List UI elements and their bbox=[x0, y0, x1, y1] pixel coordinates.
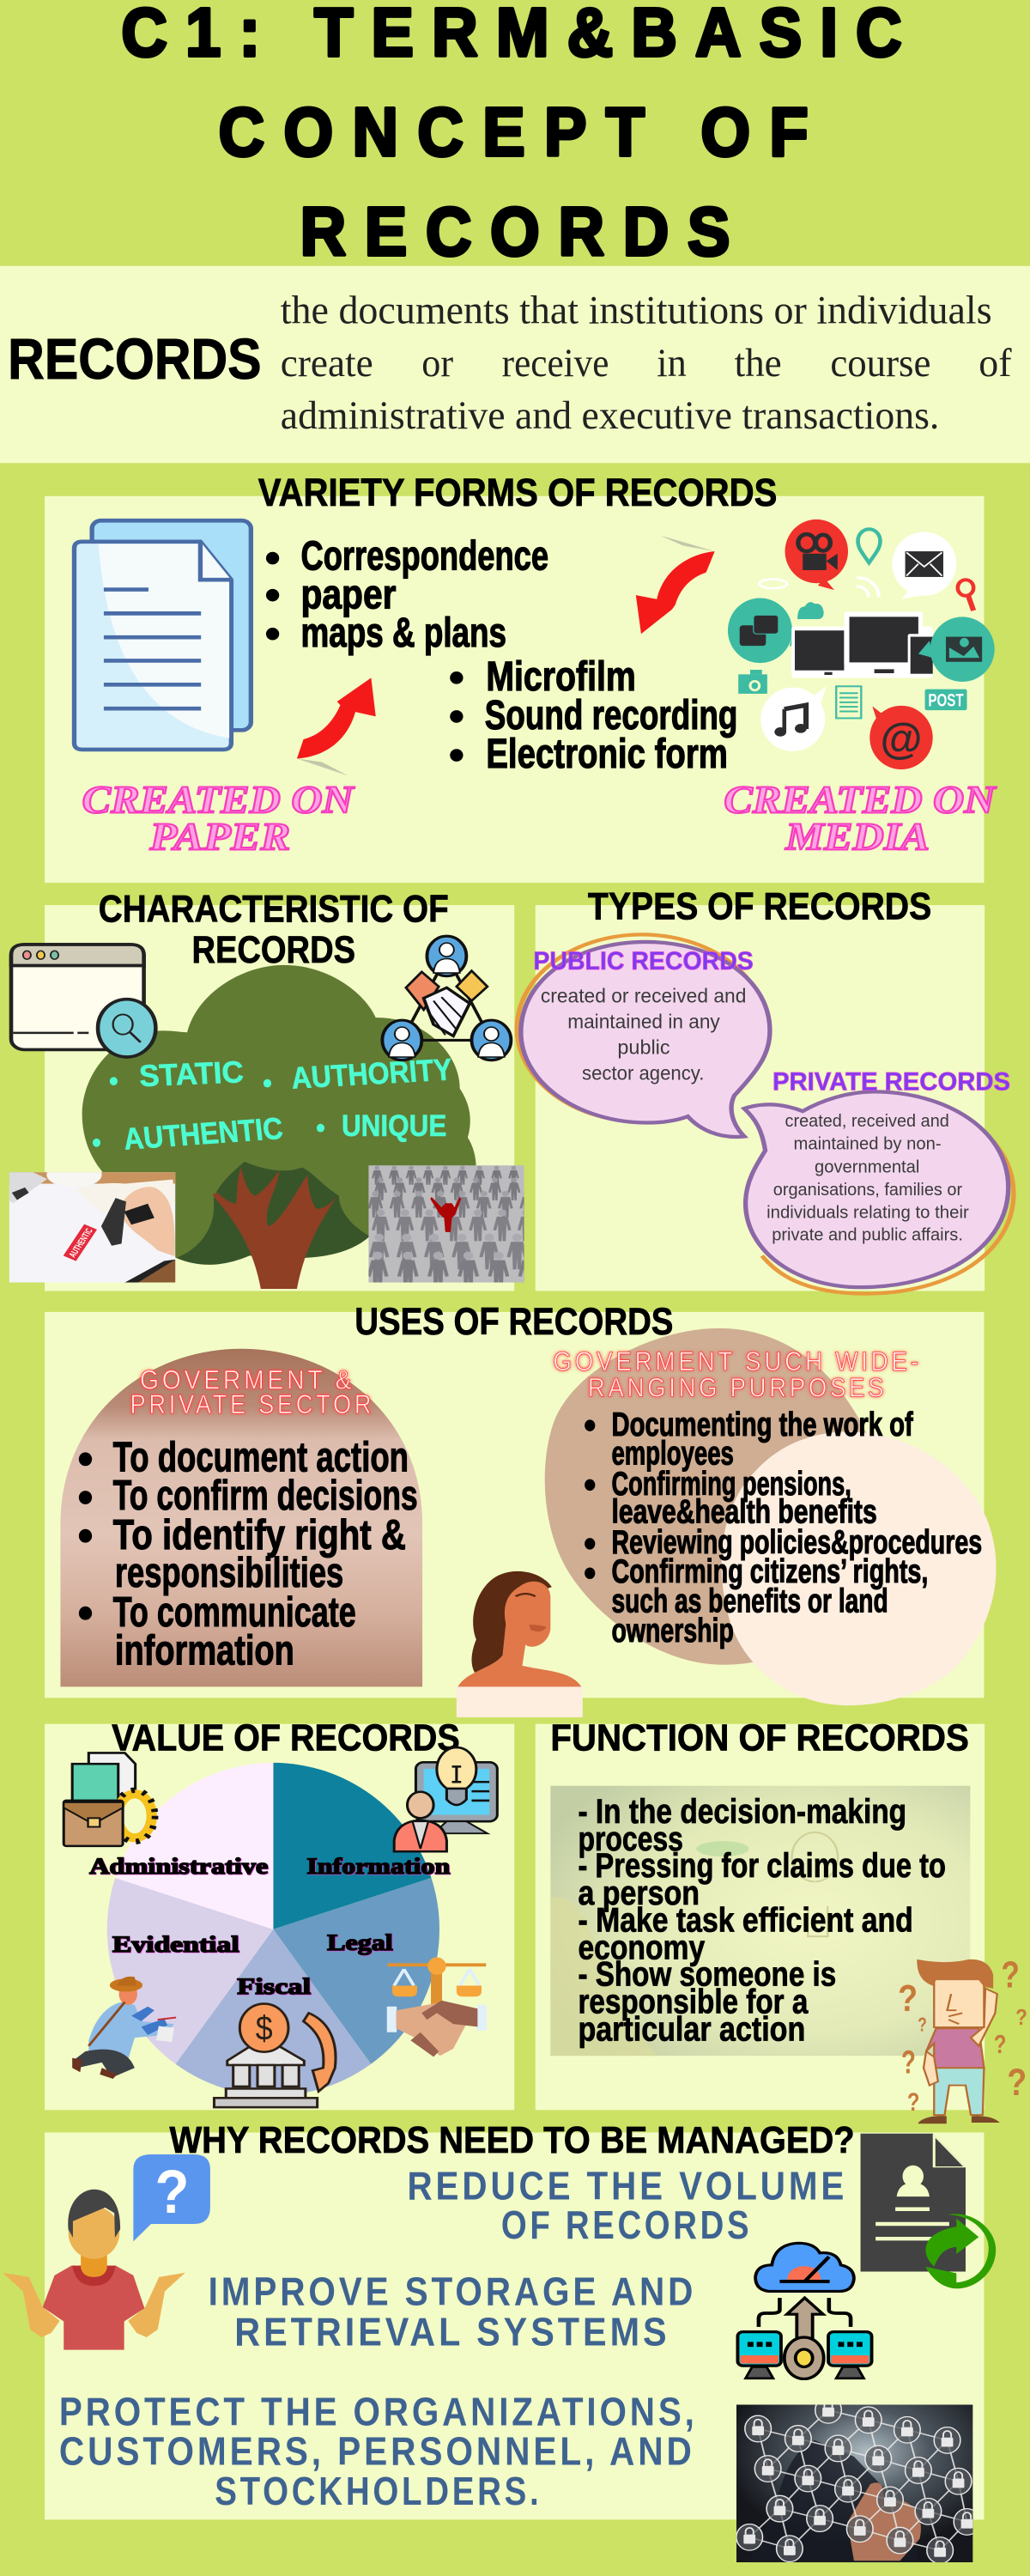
panel: uses of records bbox=[45, 1300, 997, 1717]
heading: characteristic bbox=[99, 888, 449, 971]
label: created on media bbox=[724, 779, 997, 859]
heading: characteristic: CHARACTERISTIC OF bbox=[99, 888, 449, 930]
bubble: public records: sector agency. bbox=[582, 1061, 704, 1084]
definition text: in bbox=[657, 340, 687, 385]
definition text: of bbox=[978, 340, 1012, 385]
pie label: information: Information bbox=[306, 1854, 450, 1879]
icon: media cluster bbox=[728, 519, 995, 769]
label: created on media: CREATED ON bbox=[724, 779, 997, 822]
arrow: media to list bbox=[636, 536, 715, 634]
reason: improve storage: IMPROVE STORAGE AND bbox=[209, 2269, 696, 2313]
heading: variety forms: VARIETY FORMS OF RECORDS bbox=[258, 471, 777, 514]
bubble: private records: maintained by non- bbox=[793, 1133, 942, 1153]
photo: security network bbox=[736, 2397, 980, 2563]
bubble: public records: public bbox=[617, 1036, 670, 1059]
reason: improve storage bbox=[209, 2269, 696, 2354]
tree labels: UNIQUE bbox=[342, 1109, 446, 1143]
bubble: private records: created, received and bbox=[785, 1110, 949, 1130]
icon: browser search window bbox=[11, 945, 155, 1057]
heading: records: RECORDS bbox=[8, 328, 262, 392]
function list: particular action bbox=[578, 2010, 805, 2048]
tree labels: AUTHENTIC bbox=[122, 1111, 285, 1157]
question marks: ? bbox=[994, 2030, 1006, 2059]
title: RECORDS bbox=[300, 193, 730, 270]
reason: protect the organizations: PROTECT THE ORGANIZATIONS, bbox=[59, 2389, 698, 2434]
bubble: private records: private and public affairs. bbox=[772, 1224, 963, 1244]
reason: improve storage: RETRIEVAL SYSTEMS bbox=[234, 2309, 670, 2354]
icon: archaeologist bbox=[72, 1977, 176, 2079]
bubble: public records bbox=[517, 934, 770, 1137]
subheading: government wide-ranging purposes: RANGING PURPOSES bbox=[588, 1371, 887, 1403]
stamp mark bbox=[64, 1224, 97, 1261]
pie label: fiscal: Fiscal bbox=[237, 1974, 311, 1999]
bubble: private records bbox=[744, 1068, 1014, 1293]
shape: textured arch bbox=[60, 1349, 422, 1686]
definition text: course bbox=[830, 340, 930, 385]
title: CONCEPT OF bbox=[219, 94, 809, 171]
icon: cloud network bbox=[737, 2243, 872, 2379]
tree labels bbox=[93, 1053, 453, 1157]
icon: question bubble: ? bbox=[155, 2158, 189, 2227]
list: wide-ranging purposes: employees bbox=[611, 1435, 734, 1472]
reason: protect the organizations: STOCKHOLDERS. bbox=[215, 2469, 542, 2513]
list: created on media: Electronic form bbox=[486, 731, 728, 776]
list: uses for government and private sector: To confirm decisions bbox=[113, 1472, 418, 1519]
icon: document with person bbox=[861, 2134, 966, 2271]
pie chart bbox=[107, 1763, 439, 2096]
label: created on media: MEDIA bbox=[785, 816, 930, 859]
reason: reduce the volume bbox=[407, 2163, 847, 2247]
list: created on media: Microfilm bbox=[486, 653, 636, 699]
reason: reduce the volume: OF RECORDS bbox=[501, 2202, 752, 2247]
label: created on paper bbox=[82, 779, 355, 859]
illustration: woman bbox=[457, 1571, 583, 1717]
list: created on media bbox=[450, 653, 737, 776]
question marks: ? bbox=[918, 2014, 927, 2036]
list: wide-ranging purposes: ownership bbox=[611, 1612, 734, 1649]
definition text: the bbox=[735, 340, 782, 385]
list: created on paper: Correspondence bbox=[301, 532, 548, 578]
label: created on paper: CREATED ON bbox=[82, 779, 355, 822]
function list: responsible for a bbox=[578, 1983, 809, 2020]
panel: definition of records bbox=[0, 266, 1030, 463]
function list: a person bbox=[578, 1874, 700, 1912]
subheading: government and private sector bbox=[130, 1364, 374, 1419]
list: created on media: Sound recording bbox=[485, 691, 737, 738]
shape: cream blob bbox=[722, 1431, 997, 1705]
tree labels: STATIC bbox=[138, 1054, 245, 1093]
pie label: administrative: Administrative bbox=[89, 1854, 268, 1879]
subheading: government wide-ranging purposes bbox=[553, 1346, 922, 1403]
question marks: ? bbox=[901, 2044, 916, 2081]
definition text: or bbox=[421, 340, 453, 385]
list: uses for government and private sector bbox=[79, 1433, 418, 1674]
shape: brown blob bbox=[545, 1328, 867, 1665]
panel: types of records bbox=[517, 885, 1014, 1293]
list: uses for government and private sector: information bbox=[115, 1627, 294, 1674]
icon: briefcase and gear bbox=[64, 1753, 155, 1846]
list: created on paper: paper bbox=[301, 571, 396, 617]
list: uses for government and private sector: To communicate bbox=[113, 1589, 356, 1636]
question marks bbox=[898, 1954, 1027, 2116]
heading: characteristic: RECORDS bbox=[191, 928, 355, 971]
panel: function of records bbox=[536, 1717, 1027, 2123]
question marks: ? bbox=[898, 1978, 918, 2020]
definition text: administrative and executive transactions. bbox=[281, 392, 939, 437]
function list: - Show someone is bbox=[578, 1955, 836, 1994]
reason: reduce the volume: REDUCE THE VOLUME bbox=[407, 2163, 847, 2208]
arrow: paper to list bbox=[297, 677, 376, 775]
post tag: POST bbox=[928, 690, 964, 710]
definition text: receive bbox=[502, 340, 609, 385]
list: wide-ranging purposes bbox=[585, 1406, 982, 1649]
bubble: private records: governmental bbox=[815, 1157, 919, 1176]
question marks: ? bbox=[1001, 1954, 1020, 1996]
definition text bbox=[281, 288, 1012, 437]
bubble: public records: created or received and bbox=[541, 984, 746, 1007]
photo: stamping authentic bbox=[9, 1162, 175, 1283]
question marks: ? bbox=[907, 2088, 919, 2116]
icon: scales and handshake bbox=[387, 1957, 487, 2057]
function list bbox=[578, 1793, 946, 2048]
pie label: evidential: Evidential bbox=[112, 1932, 239, 1957]
label: created on paper: PAPER bbox=[148, 816, 290, 859]
list: created on paper: maps & plans bbox=[301, 609, 506, 655]
stamp mark: AUTHENTIC bbox=[68, 1227, 95, 1259]
icon: media cluster: @ bbox=[881, 714, 922, 762]
icon: paper documents bbox=[74, 520, 251, 750]
title bbox=[121, 0, 902, 270]
post tag bbox=[925, 690, 967, 710]
icon: handshake network bbox=[382, 936, 511, 1060]
bubble: private records: individuals relating to their bbox=[766, 1202, 969, 1222]
icon: green recycle arrow bbox=[925, 2214, 996, 2288]
bubble: public records: PUBLIC RECORDS bbox=[533, 947, 754, 975]
list: uses for government and private sector: To identify right & bbox=[113, 1511, 406, 1558]
icon: information monitor bbox=[394, 1747, 497, 1851]
photo: crowd with red figure bbox=[368, 1165, 524, 1283]
heading: value: VALUE OF RECORDS bbox=[112, 1717, 460, 1759]
illustration: confused man bbox=[917, 1959, 1000, 2123]
reason: protect the organizations bbox=[59, 2389, 698, 2513]
heading: uses: USES OF RECORDS bbox=[354, 1300, 673, 1343]
subheading: government and private sector: PRIVATE SECTOR bbox=[130, 1388, 374, 1419]
pie label: legal: Legal bbox=[327, 1930, 393, 1955]
function list: process bbox=[578, 1820, 683, 1858]
reason: protect the organizations: CUSTOMERS, PERSONNEL, AND bbox=[59, 2428, 695, 2474]
photo: ideas background bbox=[550, 1786, 970, 2056]
icon: bank and coin: $ bbox=[256, 2009, 273, 2048]
illustration: tree bbox=[82, 965, 476, 1289]
panel: why records need to be managed bbox=[3, 2120, 996, 2563]
icon: person shrugging bbox=[3, 2190, 185, 2350]
list: uses for government and private sector: To document action bbox=[113, 1433, 409, 1480]
icon: bank and coin bbox=[214, 2004, 336, 2107]
list: created on paper bbox=[266, 532, 548, 655]
subheading: government and private sector: GOVERMENT & bbox=[140, 1364, 354, 1394]
bubble: private records: organisations, families or bbox=[773, 1179, 962, 1199]
definition text: create bbox=[281, 340, 373, 385]
tree labels: AUTHORITY bbox=[290, 1053, 453, 1096]
icon: question bubble bbox=[133, 2154, 210, 2241]
panel: characteristic of records bbox=[9, 888, 524, 1291]
bubble: public records: maintained in any bbox=[567, 1010, 720, 1033]
panel: value of records bbox=[45, 1717, 514, 2110]
list: uses for government and private sector: responsibilities bbox=[115, 1549, 343, 1596]
function list: economy bbox=[578, 1929, 706, 1966]
panel: variety forms of records bbox=[45, 471, 997, 883]
